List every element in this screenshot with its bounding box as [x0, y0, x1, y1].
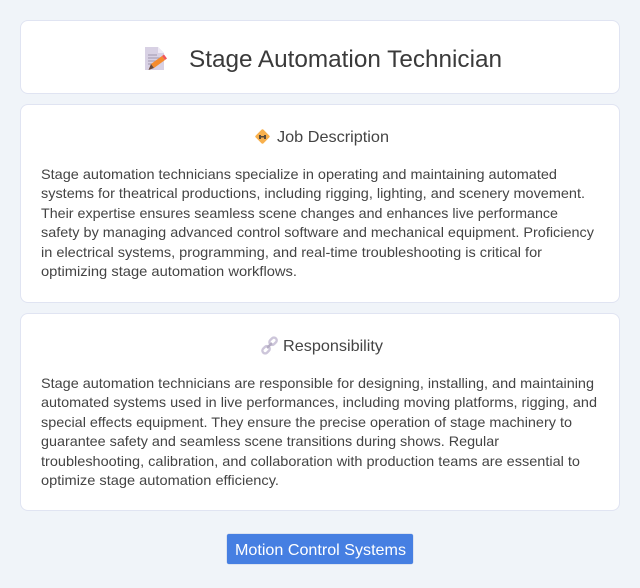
text block: responsibility	[41, 375, 597, 488]
text block: job description: optimizing stage automation workflows.	[41, 263, 297, 279]
icon: diamond sign	[255, 129, 270, 144]
text block: job description: safety by managing advanced control software and mechanical equipment. Proficiency	[41, 224, 594, 240]
text block: job description: in electrical systems, programming, and real-time troubleshooting is critical for	[41, 244, 542, 260]
heading: responsibility: Responsibility	[283, 338, 383, 355]
text block: responsibility: Stage automation technicians are responsible for designing, installing, and maintaining	[41, 375, 594, 391]
text block: responsibility: optimize stage automation efficiency.	[41, 472, 279, 488]
icon: chain link	[261, 336, 278, 355]
panel: responsibility	[20, 313, 620, 511]
text block: job description	[41, 166, 594, 279]
text block: job description: Their expertise ensures seamless scene changes and enhances live performance	[41, 205, 558, 221]
button: motion control systems	[227, 534, 413, 564]
text block: responsibility: guarantee safety and seamless scene transitions during shows. Regular	[41, 433, 499, 449]
button: motion control systems: Motion Control Systems	[235, 542, 406, 559]
panel: title card	[20, 20, 620, 94]
title: Stage Automation Technician	[189, 46, 502, 73]
panel: job description	[20, 104, 620, 303]
text block: responsibility: automated systems used in live performances, including moving platforms, rigging, and	[41, 394, 597, 410]
text block: job description: systems for theatrical productions, including rigging, lighting, and scenery movement.	[41, 185, 585, 201]
text block: job description: Stage automation technicians specialize in operating and maintaining automated	[41, 166, 557, 182]
text block: responsibility: special effects equipment. They ensure the precise operation of stage machinery to	[41, 414, 572, 430]
heading: job description: Job Description	[277, 129, 389, 146]
icon: document with pencil	[145, 47, 167, 70]
text block: responsibility: troubleshooting, calibration, and collaboration with production teams are essential to	[41, 453, 580, 469]
